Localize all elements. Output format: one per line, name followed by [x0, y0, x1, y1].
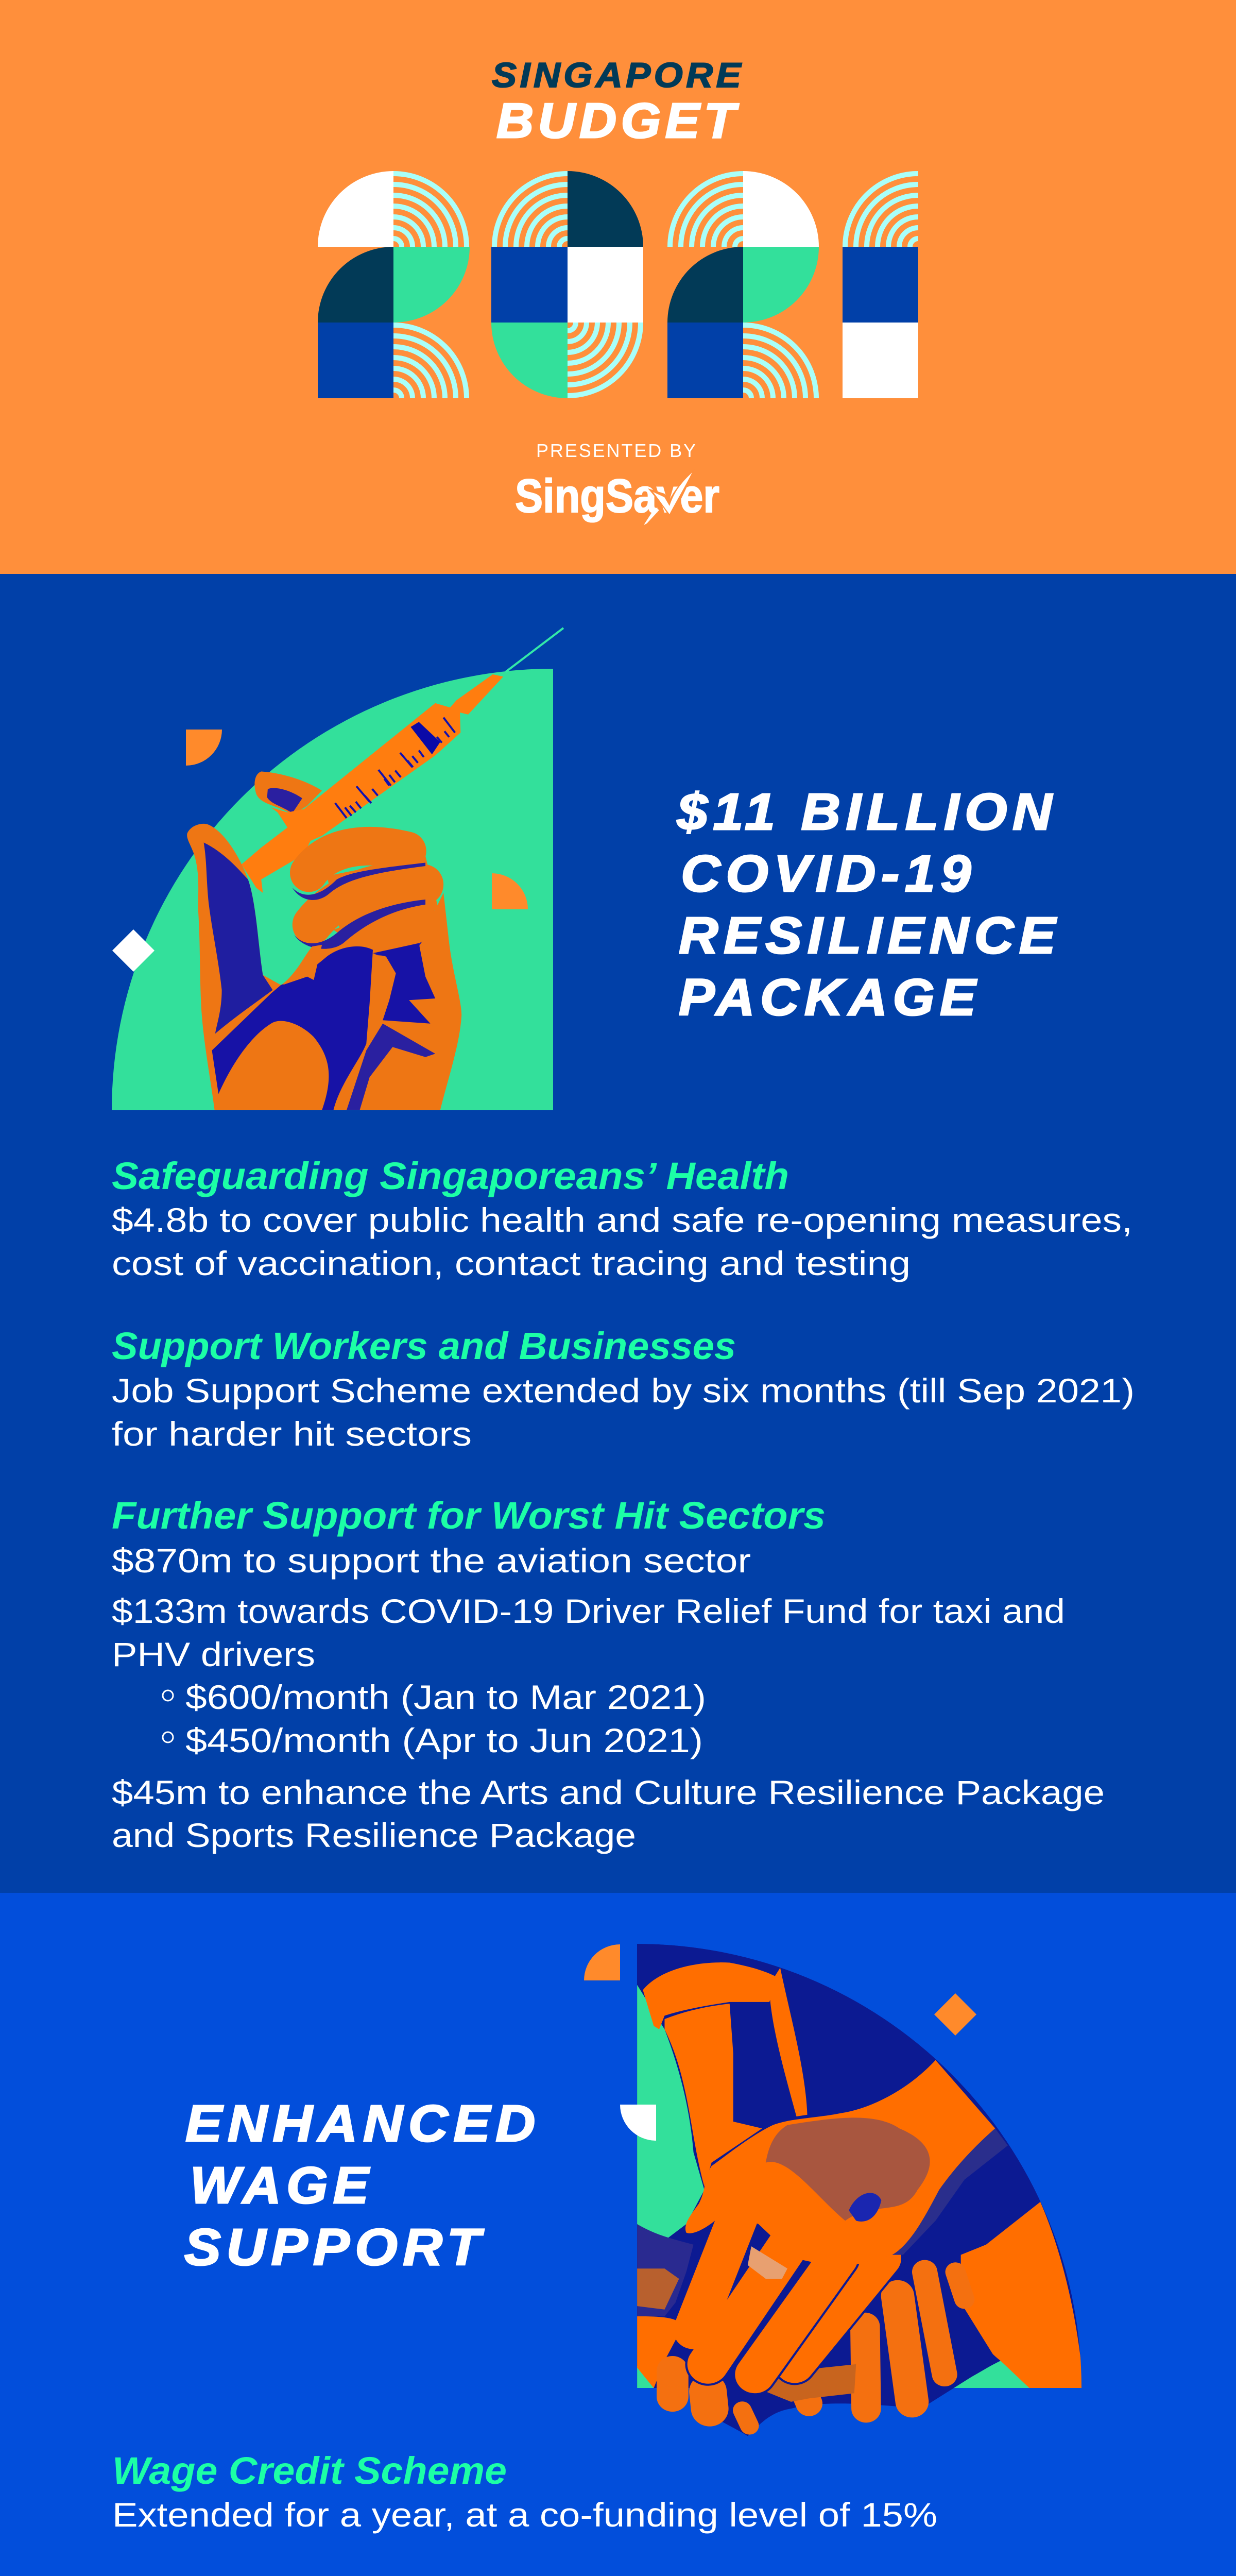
text block: worst hit sectors: $870m to support the aviation sector	[112, 1541, 751, 1580]
text block: wage credit scheme: Wage Credit Scheme	[112, 2449, 507, 2492]
text block: worst hit sectors: $45m to enhance the Arts and Culture Resilience Package	[112, 1773, 1105, 1811]
panel: header	[0, 0, 1236, 574]
syringe	[242, 674, 503, 893]
small finger	[283, 945, 322, 985]
fingers	[309, 846, 425, 943]
illustration: stacked hands	[584, 1944, 1084, 2436]
white quarter accent	[620, 2105, 656, 2141]
title: Singapore Budget: SINGAPORE	[492, 56, 744, 95]
digit 2	[667, 171, 819, 398]
orange quarter accent	[584, 1944, 620, 1980]
finger shadows	[293, 862, 425, 956]
heading: enhanced wage support	[184, 2095, 541, 2276]
heading: $11 billion COVID-19 resilience package	[677, 783, 1061, 1026]
heading: $11 billion COVID-19 resilience package: PACKAGE	[679, 969, 981, 1026]
hand	[187, 824, 461, 1110]
digit 2	[318, 171, 470, 398]
text block: worst hit sectors: $133m towards COVID-19 Driver Relief Fund for taxi and	[112, 1592, 1065, 1630]
white diamond accent	[112, 929, 154, 972]
illustration: hand holding syringe	[112, 628, 563, 1110]
text block: wage credit scheme: Extended for a year, at a co-funding level of 15%	[112, 2496, 937, 2534]
digit 0	[491, 171, 643, 398]
heading: enhanced wage support: SUPPORT	[184, 2218, 486, 2276]
top hand	[685, 2060, 1008, 2279]
text block: worst hit sectors: and Sports Resilience Package	[112, 1816, 636, 1854]
lower fingers	[673, 2272, 965, 2426]
text block: wage credit scheme	[112, 2449, 937, 2534]
title: Singapore Budget: BUDGET	[496, 93, 740, 148]
palm shadow	[212, 946, 373, 1110]
palm and thumb	[187, 824, 461, 1110]
text block: support workers: for harder hit sectors	[112, 1415, 472, 1453]
text block: worst hit sectors: $450/month (Apr to Jun 2021)	[185, 1721, 703, 1759]
arm and sleeve	[637, 1962, 1084, 2388]
text block: support workers: Support Workers and Businesses	[112, 1325, 736, 1367]
heading: $11 billion COVID-19 resilience package: COVID-19	[681, 845, 976, 903]
text block: worst hit sectors: PHV drivers	[112, 1635, 315, 1673]
heading: $11 billion COVID-19 resilience package: $11 BILLION	[677, 783, 1057, 841]
text: presented by: PRESENTED BY	[536, 440, 699, 461]
text block: worst hit sectors: $600/month (Jan to Mar 2021)	[185, 1678, 706, 1716]
heading: enhanced wage support: ENHANCED	[185, 2095, 541, 2153]
index fingertip	[254, 771, 322, 815]
green quarter circle	[112, 669, 553, 1110]
title: Singapore Budget	[492, 56, 744, 148]
text block: safeguarding health: cost of vaccination, contact tracing and testing	[112, 1244, 911, 1282]
syringe and hand artwork	[187, 674, 503, 1110]
heading: enhanced wage support: WAGE	[190, 2157, 374, 2214]
orange quarter accent	[186, 730, 222, 766]
text block: worst hit sectors	[112, 1494, 1105, 1854]
quarter circle artwork	[637, 1944, 1084, 2388]
lower hands overlapping the base	[673, 2060, 1008, 2436]
text block: safeguarding health: $4.8b to cover public health and safe re-opening measures,	[112, 1201, 1132, 1239]
logo: SingSaver: SingSaver	[515, 470, 719, 522]
text block: support workers: Job Support Scheme extended by six months (till Sep 2021)	[112, 1371, 1135, 1410]
text block: support workers	[112, 1325, 1135, 1453]
orange diamond accent	[934, 1993, 976, 2036]
orange quarter accent	[492, 873, 528, 909]
panel: enhanced wage support	[0, 1893, 1236, 2576]
top hand fingers	[694, 2183, 881, 2375]
green backdrop	[637, 1985, 1033, 2388]
graphic: 2021 geometric numerals	[318, 171, 918, 398]
heading: $11 billion COVID-19 resilience package: RESILIENCE	[679, 907, 1061, 964]
digit 1	[843, 174, 918, 398]
text block: worst hit sectors: Further Support for Worst Hit Sectors	[112, 1494, 826, 1537]
panel: COVID-19 resilience package	[0, 574, 1236, 1893]
text block: safeguarding health: Safeguarding Singaporeans’ Health	[112, 1155, 789, 1197]
text block: safeguarding health	[112, 1155, 1132, 1282]
needle	[506, 628, 563, 672]
thumb shadow	[204, 842, 272, 1033]
